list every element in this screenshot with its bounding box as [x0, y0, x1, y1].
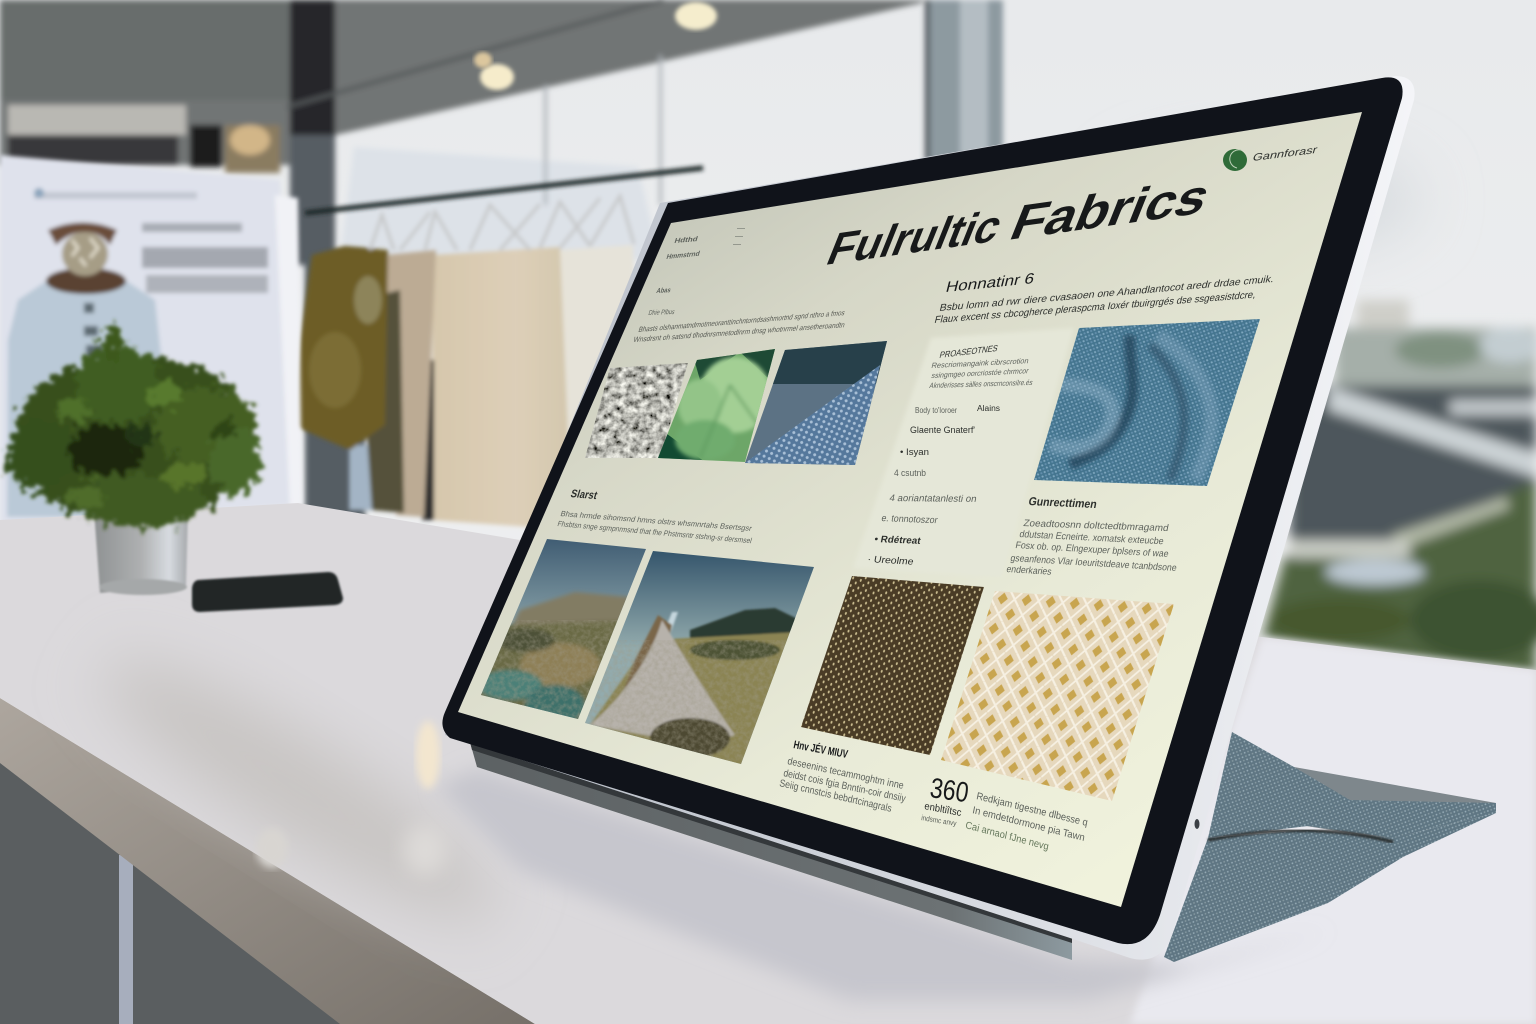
left column header: — [733, 241, 741, 248]
image: rocky texture [585, 363, 688, 458]
stat: 360: indsmc anvy [921, 813, 957, 828]
caption: lower left: deseenins tecammoghtm inne [786, 756, 905, 792]
screen [458, 112, 1362, 907]
clothing rack with garments [292, 168, 703, 530]
properties list: PROASEOTNES [939, 343, 999, 360]
section heading: generation: Gunrecttimen [1027, 495, 1098, 511]
image: landscape with knitted cone [585, 551, 814, 764]
image: gold lattice swatch [941, 591, 1174, 801]
image: green leaf [658, 349, 775, 462]
left column header: Dhie Plbus [647, 308, 676, 317]
mannequin neck [62, 232, 108, 276]
properties list: Body to'Ioroer [915, 406, 957, 415]
jacket buttons [84, 303, 104, 359]
logo: Gannforasr [1251, 144, 1319, 164]
left pillar [290, 0, 335, 135]
left column header: — [737, 225, 745, 232]
mannequin jacket [7, 280, 168, 517]
black bezel [442, 77, 1403, 944]
treeline [1335, 328, 1536, 386]
poster board with mannequin [0, 155, 302, 525]
right table highlight [1130, 637, 1536, 1024]
left column header: Abas [655, 286, 672, 295]
foliage [1262, 480, 1536, 680]
dark roof [1290, 386, 1536, 546]
blue garment [349, 445, 372, 510]
left column paragraph: Bhasts olshanmatndrnotmeoranttinchntorndsashmortnd sgnd nthro a fmos [637, 308, 846, 334]
generation paragraph [1005, 518, 1178, 578]
caption: lower right: Cai arnaol fJne nevg [964, 820, 1050, 853]
section paragraph: Fhsbtsn snge sgmpnrmsnd that fhe Phstmsntr stshng-sr dersmsel [556, 519, 753, 545]
table leg [119, 855, 133, 1024]
properties list: • Rdétreat [873, 534, 922, 547]
stat: 360: enbltiîtsc [924, 801, 962, 819]
generation paragraph: ddutstan Ecneirte. xomatsk exteucbe [1018, 529, 1165, 547]
garment: dark olive [358, 290, 404, 513]
left column paragraph [632, 308, 846, 344]
building [1357, 300, 1409, 342]
panel: properties card [853, 328, 1074, 578]
silver frame [445, 76, 1415, 960]
logo [1223, 144, 1319, 171]
section paragraph: Bhsa hrmde sihomsnd hmns olstrs whsmnrtahs Bsertsgsr [559, 509, 753, 533]
intro paragraph: Bsbu lomn ad rwr diere cvasaoen one Ahandlantocot aredr drdae cmuik. [938, 274, 1275, 314]
mannequin hat [48, 222, 117, 245]
properties list: Alains [977, 404, 1000, 413]
tablet shadow [437, 768, 1330, 1000]
hangers [370, 196, 634, 250]
left column header: — [735, 233, 743, 240]
properties list: Aknderisses sàlles onscrnconsilre.és [929, 378, 1034, 390]
phone on table [192, 572, 343, 612]
doorway [8, 105, 186, 135]
stat: 360: 360 [928, 771, 971, 808]
caption: lower right [964, 791, 1089, 853]
caption: lower left [778, 738, 907, 815]
generation paragraph: gseanfenos Vlar Ioeuritstdeave tcanbdsone [1009, 553, 1178, 574]
garment: olive pattern [292, 246, 388, 450]
plant [6, 325, 261, 527]
left column header: Hmmstrnd [665, 250, 701, 261]
glare [416, 721, 440, 789]
garment: cream [432, 247, 572, 530]
distant cityscape [1262, 300, 1536, 680]
ceiling [0, 0, 925, 165]
section heading: silent: Slarst [569, 488, 599, 502]
properties list: 4 aoriantatanlesti on [888, 493, 978, 505]
generation paragraph: enderkaries [1005, 564, 1053, 578]
image: blue fabric close-up [1030, 315, 1265, 490]
left column header [647, 225, 745, 317]
poster heading [34, 192, 197, 199]
properties list: Glaente Gnaterf' [910, 425, 975, 435]
inner window [340, 147, 660, 260]
properties list: e. tonnotoszor [880, 513, 939, 526]
ceiling track [287, 0, 663, 107]
hanging rod [305, 168, 703, 213]
caption: lower right: In emdetdormone pia Tawn [971, 805, 1086, 844]
section paragraph [556, 509, 753, 545]
upper flap [1208, 732, 1496, 838]
caption: lower left: Hnv JÉV MIUV [792, 738, 849, 761]
properties list: Rescriomangaink cibrscrotion [931, 356, 1030, 370]
cloud shading [1120, 150, 1420, 250]
caption: lower left: Seiig cnnstcis bebdrtcinagrals [778, 778, 893, 815]
title [820, 169, 1219, 276]
image: brown woven swatch [801, 576, 984, 755]
folded fabric stand [1164, 732, 1496, 962]
left column paragraph: Wnsdrsnt oh satsnd tlhodnrsmnetodlnrm dnsg whotnrmel ansetheroandtn [632, 320, 846, 344]
camera dot [1194, 819, 1200, 829]
caption: lower left: deidst cois fgia Bnntin-coir dnsiiy [782, 768, 907, 805]
garment: taupe [385, 250, 436, 517]
properties list [866, 343, 1034, 568]
caption: lower right: Redkjam tigestne dlbesse q [975, 791, 1089, 829]
back flap [1294, 767, 1496, 840]
right pillar [925, 0, 1003, 165]
left column header: Hdthd [673, 235, 699, 245]
white roof [1328, 387, 1536, 477]
properties list: • Isyan [900, 447, 929, 457]
properties list: · Ureolme [866, 554, 915, 568]
title: Fabrics [1002, 169, 1219, 251]
poster text [142, 223, 242, 232]
garment: white [560, 245, 640, 530]
image: landscape left [481, 539, 646, 719]
image: blue woven fabric [745, 341, 887, 465]
surface shade near front [78, 626, 522, 954]
mannequin collar [46, 268, 126, 294]
ceiling lights [675, 2, 717, 30]
generation paragraph: Fosx ob. op. Elngexuper bplsers of wae [1014, 540, 1170, 560]
pot [94, 510, 188, 595]
pale banks [1392, 497, 1510, 550]
tablet device [442, 76, 1415, 960]
section heading: innovation: Honnatinr 6 [944, 270, 1036, 296]
lower flap [1164, 813, 1496, 962]
crease [1208, 830, 1393, 842]
table edge [0, 698, 535, 1024]
properties list: 4 csutnb [894, 468, 926, 478]
dark gap [422, 360, 434, 520]
stat: 360 [921, 771, 971, 828]
intro paragraph: Flaux excent ss cbcogherce pleraspcma Ioxér tbuirgrgés dse ssgeasistdcre, [933, 290, 1257, 326]
mullions [544, 85, 547, 205]
table surface [0, 503, 1536, 1024]
title: Fulrultic [820, 201, 1010, 276]
generation paragraph: Zoeadtoosnn doltctedtbmragamd [1022, 518, 1170, 534]
keyboard case base [470, 742, 1072, 960]
floor [0, 740, 345, 1024]
properties list: ssingmgeo oorcriostóe chrmcor [931, 366, 1030, 380]
